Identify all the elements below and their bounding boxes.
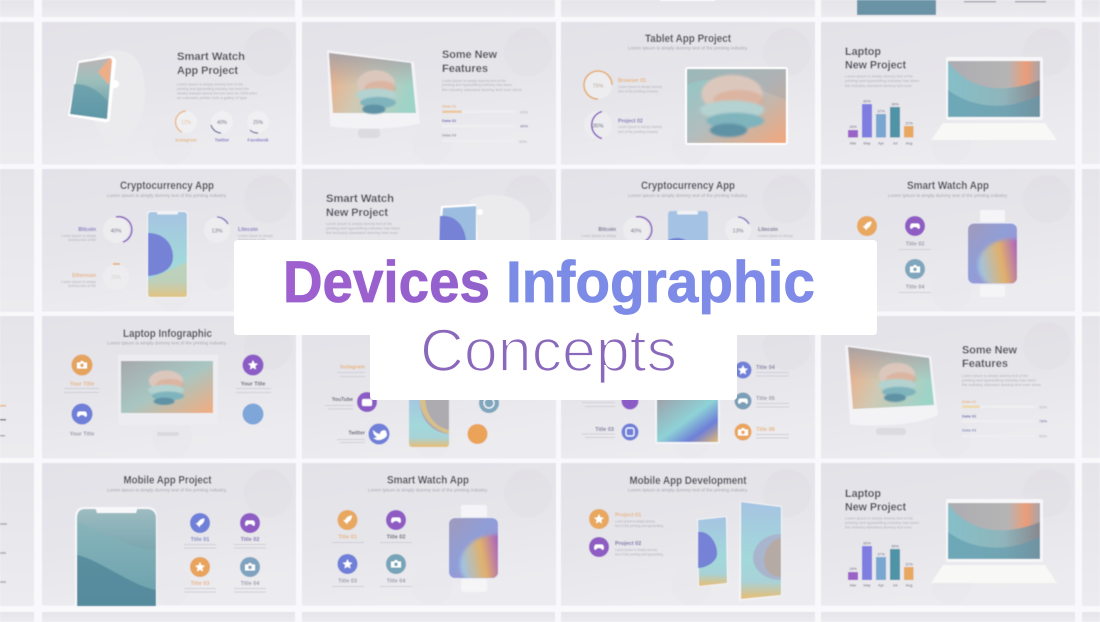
ring: project <box>584 111 612 139</box>
icon: star: Project 01 <box>615 512 641 518</box>
panel: social phone app <box>302 316 556 458</box>
description: the industry standard dummy text ever <box>845 524 913 530</box>
panel: smart watch app top <box>821 169 1075 312</box>
icon: camera orange <box>64 354 99 393</box>
heading: Smart Watch App <box>387 474 469 486</box>
progress ring: instagram: Instagram <box>175 138 197 142</box>
bar chart: 18% <box>849 125 857 129</box>
progress bars: 30% <box>1039 404 1047 410</box>
heading: Mobile App Project <box>124 474 212 486</box>
image: tablet <box>685 67 788 145</box>
panel: tablet app project <box>561 22 815 164</box>
description: printing and typesetting industry has been <box>962 378 1036 382</box>
image: laptop <box>931 57 1057 140</box>
description: printing and typesetting industry has been the <box>177 86 250 91</box>
panel: mobile app project <box>42 463 296 606</box>
bar chart: 37% <box>877 552 885 556</box>
ring: litecoin: Lorem Ipsum is simply <box>238 234 273 238</box>
ring: ethereum: 25% <box>111 275 122 281</box>
label: youtube: YouTube <box>332 397 353 403</box>
ring: litecoin: 13% <box>732 228 744 234</box>
panel: cryptocurrency app left <box>42 169 296 312</box>
subtitle: Lorem Ipsum is simply dummy text of the printing industry. <box>628 46 748 50</box>
bar chart: May <box>863 142 871 146</box>
icon: star <box>589 509 663 529</box>
icon: youtube <box>357 392 377 412</box>
icon: rocket: Title 01 <box>191 537 209 543</box>
ring: faint <box>204 264 230 290</box>
progress bars: Data 03 <box>962 428 977 432</box>
heading: Mobile App Development <box>630 475 747 487</box>
icon: game pad: Title 02 <box>906 242 924 248</box>
left edge partial slides <box>0 22 34 622</box>
heading: Smart Watch <box>177 51 245 63</box>
icon: star purple: Your Title <box>241 382 265 388</box>
icon: rocket <box>857 216 877 236</box>
label: instagram <box>337 364 365 377</box>
progress ring: twitter <box>211 111 233 142</box>
progress ring: instagram: 12% <box>181 120 192 126</box>
bar chart: Jul <box>893 142 898 146</box>
icon: help <box>582 392 638 410</box>
heading: Cryptocurrency App <box>120 180 214 192</box>
panel: laptop new project: New Project <box>845 60 906 72</box>
right edge partial slides <box>1082 22 1100 622</box>
description: Lorem Ipsum is simply dummy text of the <box>962 373 1029 378</box>
bar chart: 60% <box>863 100 871 104</box>
bar chart: 22% <box>905 562 913 566</box>
ring: bitcoin: Lorem Ipsum is simply <box>61 234 96 238</box>
icon: rocket <box>184 513 216 548</box>
label: browser: text of the printing industry <box>618 88 658 94</box>
progress bars: 30% <box>520 110 528 114</box>
bar chart <box>848 542 914 588</box>
ring: ethereum: Lorem Ipsum is simply <box>61 280 96 284</box>
icon: rocket <box>332 510 364 543</box>
bar chart: 39% <box>891 102 899 106</box>
progress bars: Data 03 <box>442 132 457 138</box>
ring: ethereum <box>61 264 129 290</box>
ring: ethereum: dummy text of the <box>68 284 96 288</box>
description: printing and typesetting industry has been <box>845 520 919 525</box>
panel: smart watch new project: New Project <box>326 207 388 219</box>
description: Lorem Ipsum is simply dummy text of the <box>442 78 507 83</box>
description <box>442 78 523 92</box>
bar chart: 39% <box>891 544 899 548</box>
progress bars: 50% <box>1039 434 1047 438</box>
icon: game pad <box>589 537 663 557</box>
image: watch <box>967 210 1020 297</box>
icon: game pad <box>899 216 931 250</box>
title: devices infographic: Devices <box>283 250 490 315</box>
bar chart: Apr <box>878 584 885 588</box>
bar chart: May <box>863 584 871 588</box>
progress ring: facebook <box>247 111 269 142</box>
panel: smart watch app project: App Project <box>177 65 238 77</box>
description: the industry standard dummy text ever <box>326 230 399 235</box>
description: an unknown printer took a galley of type <box>177 95 248 100</box>
ring: litecoin: Litecoin <box>758 227 778 233</box>
progress bars: Data 01 <box>962 399 977 404</box>
heading: Laptop <box>845 46 881 58</box>
heading: Cryptocurrency App <box>641 180 735 192</box>
description: printing and typesetting industry has been <box>845 78 919 83</box>
icon: camera: Title 04 <box>241 581 260 587</box>
progress ring: twitter: 40% <box>217 120 228 126</box>
icon: game pad teal: Title 05 <box>756 396 775 402</box>
icon: camera <box>899 259 931 293</box>
description: Lorem Ipsum is simply dummy text of the <box>845 516 914 520</box>
description <box>962 373 1042 387</box>
image: monitor <box>118 355 218 436</box>
image: watch <box>438 195 530 250</box>
heading: Laptop Infographic <box>123 328 212 340</box>
icon: star: Lorem Ipsum is simply dummy <box>615 518 655 524</box>
icon: star <box>734 362 789 378</box>
ring: litecoin: 13% <box>211 228 223 234</box>
description: printing and typesetting industry has been <box>326 226 400 230</box>
ring: litecoin <box>725 217 793 243</box>
icon: game pad blue: Your Title <box>70 432 94 438</box>
bar chart: Aug <box>906 142 912 146</box>
ring: ethereum: Ethereum <box>72 273 96 279</box>
phone <box>75 507 157 606</box>
description: the industry standard dummy text ever since <box>962 382 1042 387</box>
heading: Tablet App Project <box>645 33 731 45</box>
panel: cryptocurrency app right <box>561 169 815 312</box>
bar chart: 18% <box>849 567 857 571</box>
description <box>326 221 400 235</box>
bar chart: 37% <box>877 110 885 114</box>
panel: laptop infographic <box>42 316 296 458</box>
icon: instagram: Title 03 <box>595 427 614 433</box>
ring: bitcoin: Bitcoin <box>78 227 96 233</box>
description: Lorem Ipsum is simply dummy text of the <box>845 74 914 78</box>
icon: game pad blue <box>70 404 94 438</box>
progress bars <box>442 104 528 144</box>
icon: star: text of the printing and typesetting <box>615 523 663 528</box>
label: project <box>618 118 662 134</box>
icon: star: Title 04 <box>756 365 776 371</box>
icon: game pad: Project 02 <box>615 541 641 547</box>
panel: white banner <box>234 240 877 400</box>
image: watch <box>448 505 500 592</box>
icon: game pad <box>234 513 266 548</box>
icon: skype <box>479 393 499 413</box>
description <box>177 82 257 100</box>
ring: bitcoin <box>581 217 652 243</box>
title: concepts: Concepts <box>420 317 677 384</box>
subtitle: Lorem Ipsum is simply dummy text of the printing industry. <box>107 193 227 198</box>
heading: Smart Watch App <box>907 180 989 192</box>
ring: bitcoin: dummy text of the <box>68 238 96 242</box>
panel: some new features <box>302 22 556 164</box>
title: devices infographic <box>283 250 815 315</box>
panel: laptop new project <box>821 22 1075 164</box>
label: project: text of the printing industry <box>618 129 658 134</box>
icon: camera: Title 04 <box>387 578 406 584</box>
panel: laptop new project lower <box>821 463 1075 606</box>
subtitle: Lorem Ipsum is simply dummy text of the printing industry. <box>888 193 1008 198</box>
title: devices infographic: Infographic <box>506 250 815 315</box>
panel: smart watch new project <box>302 169 556 312</box>
bar chart <box>848 100 914 146</box>
image: smart watch <box>68 50 145 145</box>
subtitle: Lorem Ipsum is simply dummy text of the printing industry. <box>628 193 748 198</box>
ring: project: 35% <box>592 124 604 130</box>
bar chart: Aug <box>906 584 912 588</box>
label: instagram: Instagram <box>340 364 365 370</box>
ring: browser <box>584 71 612 99</box>
icon: game pad: Title 02 <box>387 534 405 540</box>
description: the industry standard dummy text ever <box>845 83 913 88</box>
bar chart: Mar <box>850 142 857 146</box>
description: Lorem Ipsum is simply dummy text of the <box>326 221 393 226</box>
image: tablet <box>655 395 720 444</box>
panel: mobile app development <box>561 463 815 606</box>
icon: blue circle <box>242 404 264 424</box>
ring: bitcoin: Lorem Ipsum is simply <box>581 234 616 238</box>
bar chart: Apr <box>878 142 885 146</box>
progress bars: 50% <box>519 139 527 144</box>
icon: game pad: text of the printing and typesetting <box>615 552 663 556</box>
image: monitor <box>845 345 938 435</box>
description: printing and typesetting industry has been <box>442 82 512 87</box>
ring: litecoin: Lorem Ipsum is simply <box>758 234 793 238</box>
phone: large <box>739 501 782 601</box>
phone <box>668 211 708 251</box>
label: project: Lorem Ipsum is simply dummy <box>618 124 662 129</box>
label: twitter <box>337 430 365 443</box>
icon: star <box>332 554 364 587</box>
icon: camera <box>234 557 266 592</box>
phone <box>409 395 449 447</box>
icon: orange circle <box>468 424 488 444</box>
image: laptop <box>931 499 1057 583</box>
panel: some new features lower: Features <box>962 358 1008 370</box>
ring: bitcoin: 40% <box>630 228 642 234</box>
icon: star <box>184 557 216 592</box>
panel: smart watch app project <box>42 22 296 164</box>
panel: tablet titles <box>561 316 815 458</box>
image: desktop monitor <box>327 50 420 138</box>
subtitle: Lorem Ipsum is simply dummy text of the printing industry. <box>107 340 227 346</box>
bar chart: 22% <box>905 122 913 126</box>
heading: Laptop <box>845 488 881 500</box>
subtitle: Lorem Ipsum is simply dummy text of the printing industry. <box>628 488 748 492</box>
heading: Some New <box>962 344 1017 356</box>
progress bars: 40% <box>520 124 528 128</box>
icon: twitter <box>368 424 390 444</box>
progress bars: 78% <box>1039 418 1047 424</box>
icon: camera <box>380 554 412 587</box>
description: industry standard dummy text ever since the 1500s when <box>177 90 257 96</box>
icon: game pad teal <box>734 392 789 410</box>
ring: bitcoin: Bitcoin <box>598 227 616 233</box>
bottom row partial slides <box>42 612 1075 622</box>
label: twitter: Twitter <box>348 430 365 436</box>
icon: star: Title 03 <box>191 581 209 587</box>
panel: smart watch app lower <box>302 463 556 606</box>
icon: game pad: Lorem Ipsum is simply dummy <box>615 547 657 552</box>
icon: instagram <box>582 424 638 440</box>
progress ring: instagram <box>175 111 197 142</box>
icon: star purple <box>236 354 271 393</box>
panel: laptop new project lower: New Project <box>845 502 906 514</box>
phone: small <box>697 516 728 587</box>
bar chart: Mar <box>850 584 857 588</box>
progress ring: facebook: 25% <box>253 120 264 126</box>
description: Lorem Ipsum is simply dummy text of the <box>177 82 244 86</box>
ring: bitcoin: 40% <box>110 228 122 234</box>
subtitle: Lorem Ipsum is simply dummy text of the printing industry. <box>107 488 227 492</box>
progress ring: facebook: Facebook <box>247 138 269 142</box>
phone <box>147 211 188 298</box>
bar chart: 60% <box>863 542 871 546</box>
icon: star: Title 03 <box>338 578 357 584</box>
panel: some new features: Features <box>442 63 488 75</box>
description <box>845 516 919 530</box>
label: browser: Browser 01 <box>618 78 646 84</box>
label: project: Project 02 <box>618 118 643 124</box>
subtitle: Lorem Ipsum is simply dummy text of the printing industry. <box>368 488 488 492</box>
ring: browser: 75% <box>592 84 604 90</box>
progress bars: Data 02 <box>442 118 457 123</box>
label: browser: Lorem Ipsum is simply dummy <box>618 84 662 89</box>
icon: rocket: Title 01 <box>338 534 357 540</box>
label: browser <box>618 78 662 94</box>
progress bars: Data 01 <box>442 104 457 108</box>
description: the industry standard dummy text ever since <box>442 87 523 92</box>
icon: game pad: Title 02 <box>241 537 259 543</box>
heading: Some New <box>442 49 497 61</box>
icon: game pad <box>380 510 412 543</box>
icon: camera: Title 04 <box>906 284 925 290</box>
title banner <box>234 240 877 400</box>
heading: Smart Watch <box>326 193 394 205</box>
panel: some new features lower <box>821 316 1075 458</box>
icon: camera orange <box>734 424 789 440</box>
progress ring: twitter: Twitter <box>215 138 229 142</box>
progress bars: Data 02 <box>962 414 977 418</box>
ring: litecoin <box>204 217 273 243</box>
progress bars <box>962 399 1047 438</box>
label: youtube <box>325 397 353 410</box>
icon: camera orange: Title 06 <box>756 427 775 433</box>
ring: bitcoin <box>61 217 132 243</box>
top row partial slides <box>0 0 1100 17</box>
ring: litecoin: Litecoin <box>238 227 258 233</box>
icon: camera orange: Your Title <box>70 382 94 388</box>
bar chart: Jul <box>893 584 898 588</box>
ring: litecoin: dummy text of the <box>238 238 266 242</box>
description <box>845 74 919 88</box>
